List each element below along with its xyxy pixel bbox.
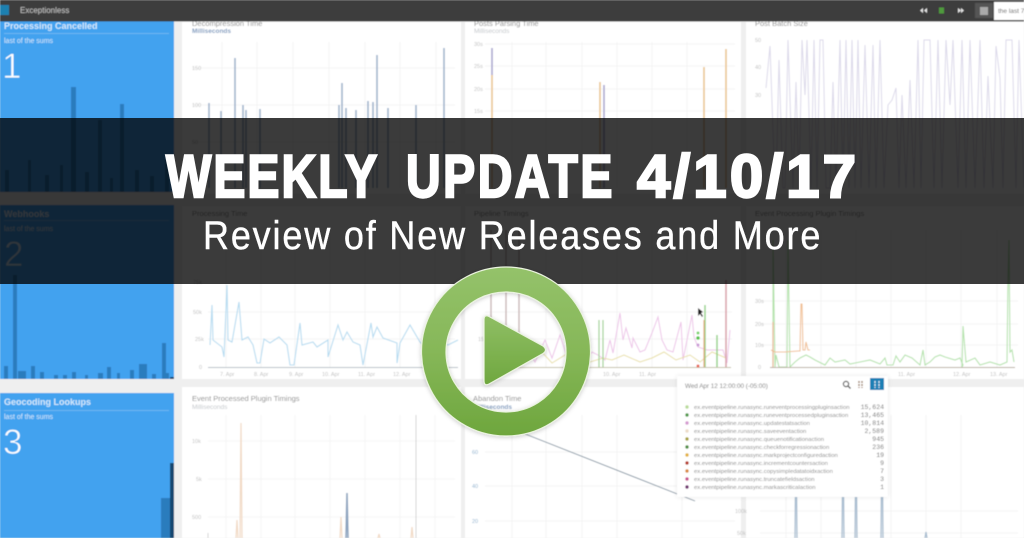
title: 4/10/17 — [637, 143, 856, 210]
icon: logo — [0, 5, 9, 15]
chart: post batch size: 40 — [755, 65, 761, 71]
chart: parsing time — [465, 19, 741, 194]
chart: event processing plugin timings: 0 — [758, 365, 761, 371]
panel: geocoding lookups: last of the sums — [4, 414, 54, 421]
panel: webhooks: 2 — [4, 235, 23, 274]
panel: webhooks — [0, 205, 174, 379]
chart: processing time: 0 — [199, 365, 202, 371]
tooltip: 2,589 — [864, 428, 884, 435]
panel: geocoding lookups: Geocoding Lookups — [4, 397, 91, 407]
chart: event processed plugin timings: 10k — [192, 439, 201, 445]
chart: event processed plugin timings: 500 — [192, 515, 201, 521]
title: WEEKLY — [166, 143, 377, 210]
panel: processing cancelled: Processing Cancelled — [4, 21, 98, 31]
chart: decompression time: 150 — [192, 66, 201, 72]
top bar — [0, 0, 1024, 22]
panel: geocoding lookups — [0, 393, 174, 538]
chart: third row right: 100k — [735, 509, 747, 515]
chart: event processing plugin timings: 20s — [755, 322, 764, 328]
chart: processing time: 8. Apr — [254, 372, 269, 378]
chart: third row right — [735, 387, 1024, 538]
chart: processing time: 12. Apr — [393, 372, 411, 378]
chart: event processed plugin timings: 5k — [196, 477, 202, 483]
chart: post batch size — [746, 19, 1024, 194]
tooltip: ex.eventpipeline.runasync.updatestatsaction — [694, 421, 810, 427]
tooltip: ex.eventpipeline.runasync.truncatefieldsaction — [694, 477, 815, 483]
chart: post batch size: 30 — [755, 93, 761, 99]
tooltip: ex.eventpipeline.runasync.markprojectconfiguredaction — [694, 453, 838, 459]
tooltip: ex.eventpipeline.runasync.runeventprocessingpluginsaction — [694, 405, 850, 411]
top bar: Exceptionless — [20, 6, 69, 15]
tooltip: 9 — [880, 460, 884, 467]
chart: abandon time — [465, 387, 741, 538]
chart: event processing plugin timings: 12. Apr — [953, 372, 971, 378]
chart: decompression time — [182, 19, 461, 194]
icon: mouse cursor — [698, 308, 703, 317]
tooltip: ex.eventpipeline.runasync.saveeventaction — [694, 429, 806, 435]
title — [166, 143, 856, 210]
time range box — [994, 2, 1024, 20]
tooltip — [677, 376, 888, 497]
chart: event processing plugin timings: 10s — [755, 343, 764, 349]
chart: parsing time: Posts Parsing Time — [474, 19, 539, 28]
chart: processing time — [182, 206, 461, 379]
panel: processing cancelled: 1 — [2, 47, 21, 86]
chart: processing time: Processing Time — [192, 209, 247, 218]
chart: post batch size: 50 — [755, 38, 761, 44]
chart: pipeline timings: 11. Apr — [639, 372, 656, 378]
chart: parsing time: Milliseconds — [474, 28, 510, 35]
icon: tooltip buttons — [843, 381, 849, 387]
tooltip: ex.eventpipeline.runasync.runeventprocessedpluginsaction — [694, 413, 848, 419]
chart: processing time: 11. Apr — [358, 372, 375, 378]
chart: event processing plugin timings: 11. Apr — [898, 372, 915, 378]
chart: parsing time: 20s — [474, 87, 483, 93]
chart: pipeline timings: 10. Apr — [603, 372, 621, 378]
chart: event processed plugin timings: Milliseconds — [192, 404, 228, 411]
chart: pipeline timings: Pipeline Timings — [474, 209, 529, 218]
icon: play button — [422, 267, 591, 436]
panel: processing cancelled: last of the sums — [4, 38, 54, 45]
chart: event processed plugin timings: Event Processed Plugin Timings — [192, 394, 300, 403]
subtitle: Review of New Releases and More — [203, 214, 820, 258]
top bar: the last 7 — [998, 8, 1024, 15]
title: UPDATE — [406, 143, 612, 210]
chart: parsing time: 30s — [474, 42, 483, 48]
chart: parsing time: 25s — [474, 64, 483, 70]
tooltip: ex.eventpipeline.runasync.copysimpledatatoidxaction — [694, 469, 833, 475]
chart: processing time: 75k — [193, 280, 202, 286]
chart: post batch size: Post Batch Size — [755, 19, 808, 28]
chart: processing time: 25k — [195, 337, 204, 343]
panel: processing cancelled — [0, 20, 174, 192]
chart: processing time: 9. Apr — [289, 372, 304, 378]
tooltip: 236 — [872, 444, 884, 451]
chart: processing time: 10. Apr — [322, 372, 340, 378]
tooltip: 3 — [880, 476, 884, 483]
chart: event processing plugin timings: 30s — [755, 299, 764, 305]
chart: event processing plugin timings: Event Processing Plugin Timings — [755, 209, 864, 218]
panel: webhooks: Webhooks — [4, 209, 49, 219]
panel: webhooks: last of the sums — [4, 226, 54, 233]
chart: decompression time: 100 — [192, 103, 201, 109]
chart: decompression time: 50 — [192, 140, 198, 146]
dark title band — [0, 118, 1024, 284]
tooltip: 1 — [880, 484, 884, 491]
tooltip: 7 — [880, 468, 884, 475]
tooltip: 19 — [876, 452, 884, 459]
tooltip: ex.eventpipeline.runasync.incrementcountersaction — [694, 461, 828, 467]
tooltip: ex.eventpipeline.runasync.checkforregressionaction — [694, 445, 829, 451]
chart: event processing plugin timings: 13. Apr — [990, 372, 1008, 378]
icon: calendar button — [975, 3, 993, 18]
chart: abandon time: 40 — [472, 484, 478, 490]
tooltip: 15,624 — [861, 404, 884, 411]
tooltip: 10,814 — [861, 420, 884, 427]
chart: parsing time: 15s — [474, 109, 483, 115]
chart: event processing plugin timings — [746, 206, 1024, 379]
chart: decompression time: Milliseconds — [192, 28, 231, 35]
tooltip: 945 — [872, 436, 884, 443]
tooltip: 13,465 — [861, 412, 884, 419]
chart: abandon time: 20 — [472, 519, 478, 525]
chart: decompression time: Decompression Time — [192, 19, 262, 28]
chart: processing time: 7. Apr — [220, 372, 235, 378]
chart: abandon time: 60 — [472, 450, 478, 456]
chart: pipeline timings: 15k — [478, 337, 487, 343]
chart: processing time: 50k — [193, 310, 202, 316]
chart: abandon time: Abandon Time — [473, 394, 521, 403]
chart: third row right: 50k — [737, 531, 746, 537]
icon: media controls — [920, 8, 964, 13]
chart: abandon time: Milliseconds — [473, 404, 512, 411]
chart: event processed plugin timings — [182, 387, 461, 538]
panel: geocoding lookups: 3 — [3, 423, 22, 462]
chart: pipeline timings — [465, 206, 741, 379]
tooltip: Wed Apr 12 12:00:00 (-05:00) — [685, 383, 768, 390]
tooltip: ex.eventpipeline.runasync.queuenotificationaction — [694, 437, 824, 443]
tooltip: ex.eventpipeline.runasync.markascriticalaction — [694, 485, 815, 491]
